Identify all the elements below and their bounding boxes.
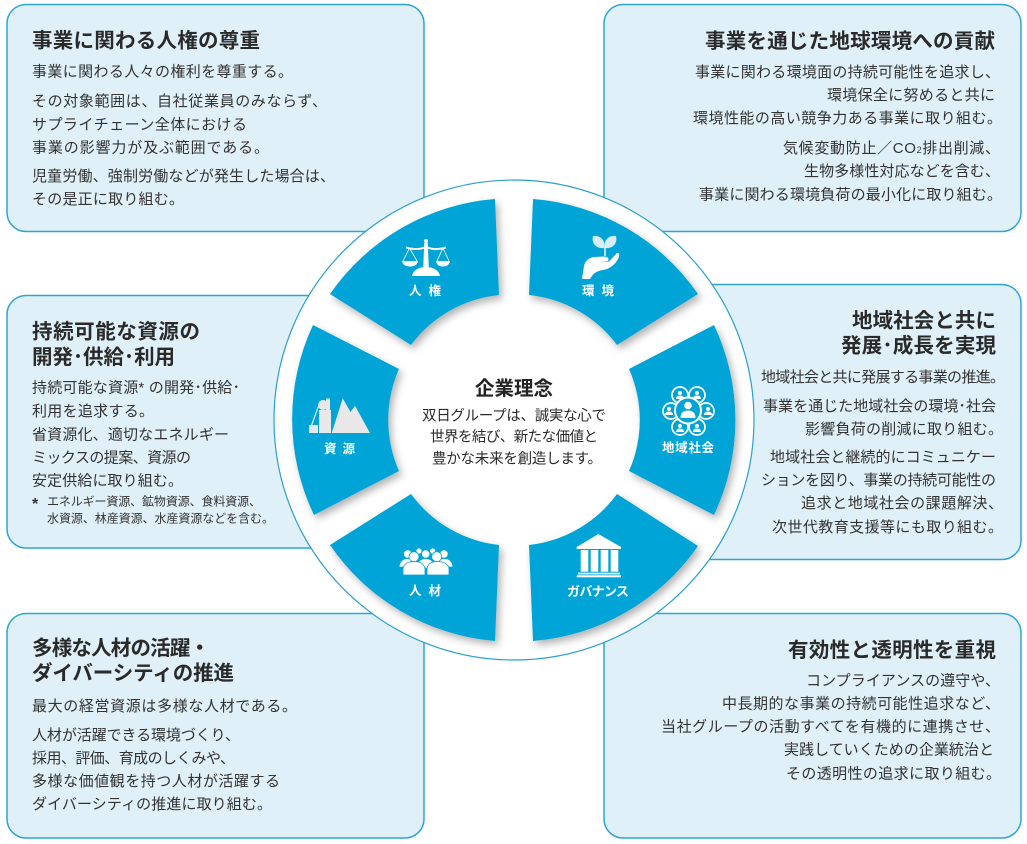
- icon: scales: [402, 239, 450, 276]
- text block: environment: 事業に関わる環境負荷の最小化に取り組む。: [699, 186, 1002, 204]
- text block: human rights: その対象範囲は、自社従業員のみならず、: [32, 92, 327, 110]
- heading: community: [841, 310, 996, 358]
- text block: environment: 事業に関わる環境面の持続可能性を追求し、: [695, 64, 1000, 81]
- icon: temple building: [577, 534, 621, 577]
- segment: human rights: [330, 199, 499, 345]
- footnote: resources: [32, 494, 274, 526]
- heading: human rights: 事業に関わる人権の尊重: [32, 28, 260, 52]
- text block: environment: 環境性能の高い競争力ある事業に取り組む。: [693, 109, 1002, 127]
- icon: plant in hand: [582, 236, 619, 279]
- text block: human rights: 事業に関わる人々の権利を尊重する。: [32, 64, 293, 80]
- text block: people: 最大の経営資源は多様な人材である。: [32, 697, 297, 715]
- text block: people: ダイバーシティの推進に取り組む。: [32, 796, 272, 813]
- text block: environment: [693, 64, 1002, 204]
- text block: human rights: 児童労働、強制労働などが発生した場合は、: [32, 168, 335, 185]
- text block: governance: その透明性の追求に取り組む。: [786, 766, 1001, 782]
- label: human rights: 人権: [409, 283, 441, 298]
- text block: community: 影響負荷の削減に取り組む。: [805, 421, 1003, 438]
- center text: 世界を結び、新たな価値と: [430, 428, 598, 446]
- text block: community: 追求と地域社会の課題解決、: [801, 495, 1003, 512]
- heading: environment: 事業を通じた地球環境への貢献: [705, 30, 996, 53]
- text block: community: ションを図り、事業の持続可能性の: [761, 472, 996, 489]
- heading: community: 発展･成長を実現: [841, 334, 996, 358]
- text block: governance: 中長期的な事業の持続可能性追求など、: [722, 696, 1000, 712]
- label: environment: 環境: [582, 283, 614, 298]
- text block: human rights: 事業の影響力が及ぶ範囲である。: [32, 138, 269, 156]
- text block: human rights: その是正に取り組む。: [32, 191, 184, 208]
- center text: 双日グループは、誠実な心で: [422, 408, 606, 424]
- segment: people: [330, 494, 499, 641]
- center: corporate philosophy: [422, 378, 606, 468]
- text block: people: [32, 697, 297, 813]
- text block: resources: 安定供給に取り組む。: [32, 472, 183, 490]
- text block: governance: コンプライアンスの遵守や、: [806, 672, 1000, 690]
- text block: resources: 持続可能な資源* の開発･供給･: [32, 380, 240, 396]
- text block: community: [761, 369, 1005, 536]
- icon: community network: [663, 387, 714, 435]
- text block: resources: ミックスの提案、資源の: [32, 450, 191, 466]
- text block: environment: 環境保全に努めると共に: [827, 87, 995, 104]
- text block: community: 事業を通じた地域社会の環境･社会: [763, 398, 996, 415]
- segment: resources: [292, 325, 399, 515]
- text block: governance: 実践していくための企業統治と: [784, 742, 994, 758]
- icon: mine and mountains: [309, 398, 370, 433]
- label: resources: 資源: [324, 441, 355, 456]
- text block: resources: 利用を追求する。: [32, 403, 154, 420]
- center text: 豊かな未来を創造します。: [432, 450, 602, 468]
- text block: human rights: サプライチェーン全体における: [32, 116, 247, 134]
- text block: environment: 気候変動防止／CO2排出削減、: [783, 140, 1000, 157]
- heading: people: ダイバーシティの推進: [32, 661, 234, 685]
- footnote: resources: 水資源、林産資源、水産資源などを含む。: [47, 512, 274, 526]
- heading: governance: 有効性と透明性を重視: [788, 639, 996, 662]
- text block: community: 地域社会と継続的にコミュニケー: [770, 449, 996, 466]
- panel: environment: [604, 4, 1021, 232]
- segment: environment: [529, 199, 698, 345]
- center heading: 企業理念: [475, 378, 553, 400]
- segment: community: [629, 325, 735, 515]
- heading: resources: 開発･供給･利用: [32, 346, 175, 369]
- text block: human rights: [32, 64, 335, 208]
- text block: people: 多様な価値観を持つ人材が活躍する: [32, 772, 280, 790]
- heading: community: 地域社会と共に: [852, 310, 996, 332]
- footnote: resources: エネルギー資源、鉱物資源、食料資源、: [47, 494, 261, 508]
- heading: resources: [32, 320, 200, 369]
- icon: group of people: [399, 548, 453, 575]
- text block: people: 人材が活躍できる環境づくり、: [32, 727, 240, 744]
- central wheel disc: [274, 180, 754, 660]
- text block: people: 採用、評価、育成のしくみや、: [32, 750, 235, 767]
- panel: resources: [7, 296, 424, 548]
- label: people: 人材: [409, 583, 441, 598]
- text block: environment: 生物多様性対応などを含む、: [804, 162, 1000, 180]
- segment: governance: [529, 494, 698, 641]
- panel: human rights: [7, 4, 424, 232]
- label: community: 地域社会: [662, 440, 714, 455]
- panel: people: [7, 614, 424, 838]
- label: governance: ガバナンス: [567, 584, 629, 599]
- text block: community: 地域社会と共に発展する事業の推進。: [761, 369, 1005, 386]
- panel: governance: [604, 614, 1021, 838]
- text block: resources: [32, 380, 240, 490]
- text block: community: 次世代教育支援等にも取り組む。: [772, 518, 1003, 536]
- heading: resources: 持続可能な資源の: [32, 320, 200, 344]
- text block: governance: [661, 672, 1001, 782]
- footnote: resources: *: [32, 496, 39, 513]
- text block: governance: 当社グループの活動すべてを有機的に連携させ、: [661, 718, 1000, 736]
- heading: people: 多様な人材の活躍・: [32, 637, 210, 660]
- text block: resources: 省資源化、適切なエネルギー: [32, 426, 229, 444]
- panel: community: [604, 284, 1021, 560]
- center text: [422, 408, 606, 468]
- heading: people: [32, 637, 234, 685]
